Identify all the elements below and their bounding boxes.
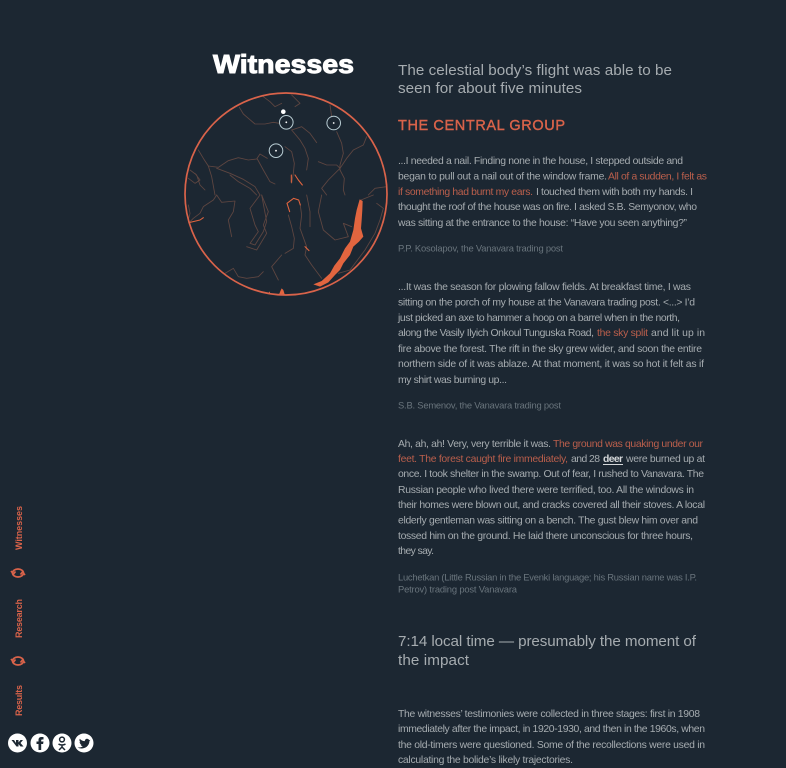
subheading: seen for about five minutes — [398, 80, 582, 97]
testimony 2: fire above the forest. The rift in the sky grew wider, and soon the entire — [398, 344, 702, 355]
testimony 2: along the Vasily Ilyich Onkoul Tunguska Road, — [398, 328, 594, 339]
testimony 1: was sitting at the entrance to the house: “Have you seen anything?” — [397, 218, 688, 229]
marker: witness 3 — [269, 144, 283, 158]
nav: results: Results — [14, 685, 24, 716]
testimony 3: Ah, ah, ah! Very, very terrible it was. — [398, 439, 551, 450]
orange river segments — [287, 198, 309, 251]
testimony 3: feet. The forest caught fire immediately, — [398, 454, 568, 465]
side navigation — [11, 506, 25, 716]
closing paragraph: The witnesses’ testimonies were collected in three stages: first in 1908 — [398, 709, 700, 720]
testimony 1: ...I needed a nail. Finding none in the house, I stepped outside and — [398, 156, 683, 167]
testimony 3: once. I took shelter in the swamp. Out of fear, I rushed to Vanavara. The — [398, 469, 704, 480]
source 1: P.P. Kosolapov, the Vanavara trading post — [398, 242, 563, 254]
testimony 1: began to pull out a nail out of the window frame. — [398, 172, 607, 182]
closing paragraph: immediately after the impact, in 1920-1930, and then in the 1960s, when — [398, 724, 705, 735]
marker: witness 1 — [280, 116, 293, 129]
testimony 1 — [397, 156, 707, 229]
lake Baikal — [313, 199, 363, 287]
testimony 3: their homes were blown out, and cracks covered all their stoves. A local — [398, 500, 705, 511]
marker: witness 2 — [327, 116, 341, 130]
social icons — [8, 734, 94, 752]
testimony 2: northern side of it was ablaze. At that moment, it was so hot it felt as if — [398, 359, 704, 370]
rivers north-east — [285, 95, 387, 195]
circle outline — [185, 93, 387, 295]
testimony 2 — [397, 282, 705, 386]
nav: witnesses: Witnesses — [14, 506, 24, 550]
testimony 3: Russian people who lived there were terrified, too. All the windows in — [398, 485, 694, 496]
subheading — [398, 62, 672, 97]
testimony 1: All of a sudden, I felt as — [608, 172, 707, 182]
orange river western edge — [190, 218, 203, 222]
rivers south-west — [188, 195, 282, 280]
icon: swap arrows — [11, 657, 25, 665]
impact time heading: 7:14 local time — presumably the moment of — [398, 633, 697, 650]
testimony 3: were burned up at — [625, 454, 705, 465]
title: Witnesses — [213, 49, 354, 79]
impact time heading — [398, 633, 697, 669]
section heading: THE CENTRAL GROUP — [398, 118, 565, 134]
icon: swap arrows — [11, 569, 25, 577]
small orange lake — [268, 288, 285, 295]
testimony 1: thought the roof of the house was on fire. I asked S.B. Semyonov, who — [398, 202, 697, 213]
marker: white dot — [281, 109, 286, 114]
nav: research: Research — [14, 599, 24, 638]
testimony 2: my shirt was burning up... — [398, 375, 507, 386]
testimony 2: the sky split — [597, 328, 648, 339]
closing paragraph: calculating the bolide’s likely trajectories. — [398, 755, 573, 766]
testimony 2: sitting on the porch of my house at the Vanavara trading post. <...> I’d — [398, 298, 695, 308]
testimony 1: I touched them with both my hands. I — [536, 187, 693, 198]
icon: vk — [8, 734, 27, 752]
icon: twitter — [74, 734, 94, 752]
testimony 2: ...It was the season for plowing fallow fields. At breakfast time, I was — [398, 282, 691, 293]
impact time heading: the impact — [398, 652, 470, 669]
source 2: S.B. Semenov, the Vanavara trading post — [398, 400, 561, 410]
map: witness locations — [185, 93, 387, 295]
source 3: Luchetkan (Little Russian in the Evenki language; his Russian name was I.P. — [398, 572, 697, 582]
testimony 3 — [398, 439, 705, 557]
testimony 1: if something had burnt my ears. — [398, 187, 533, 198]
testimony 3: tossed him on the ground. He laid there unconscious for three hours, — [398, 531, 693, 542]
subheading: The celestial body’s flight was able to be — [398, 62, 672, 79]
icon: odnoklassniki — [52, 734, 72, 752]
icon: facebook — [30, 734, 50, 752]
orange river segments north — [291, 175, 302, 185]
testimony 2: just picked an axe to hammer a hoop on a barrel when in the north, — [397, 313, 680, 324]
closing paragraph — [398, 709, 705, 766]
testimony 3: elderly gentleman was sitting on a bench. The gust blew him over and — [398, 516, 698, 526]
testimony 3: and 28 — [571, 454, 600, 465]
testimony 3: they say. — [398, 546, 434, 557]
source 3: Petrov) trading post Vanavara — [398, 584, 518, 594]
closing paragraph: the old-timers were questioned. Some of the recollections were used in — [398, 740, 705, 751]
glossary word: deer: deer — [603, 454, 623, 465]
rivers north-west — [188, 97, 282, 195]
rivers south-east — [285, 195, 383, 278]
source 3 — [398, 572, 697, 594]
testimony 3: The ground was quaking under our — [553, 439, 704, 450]
testimony 2: and lit up in — [651, 328, 705, 339]
